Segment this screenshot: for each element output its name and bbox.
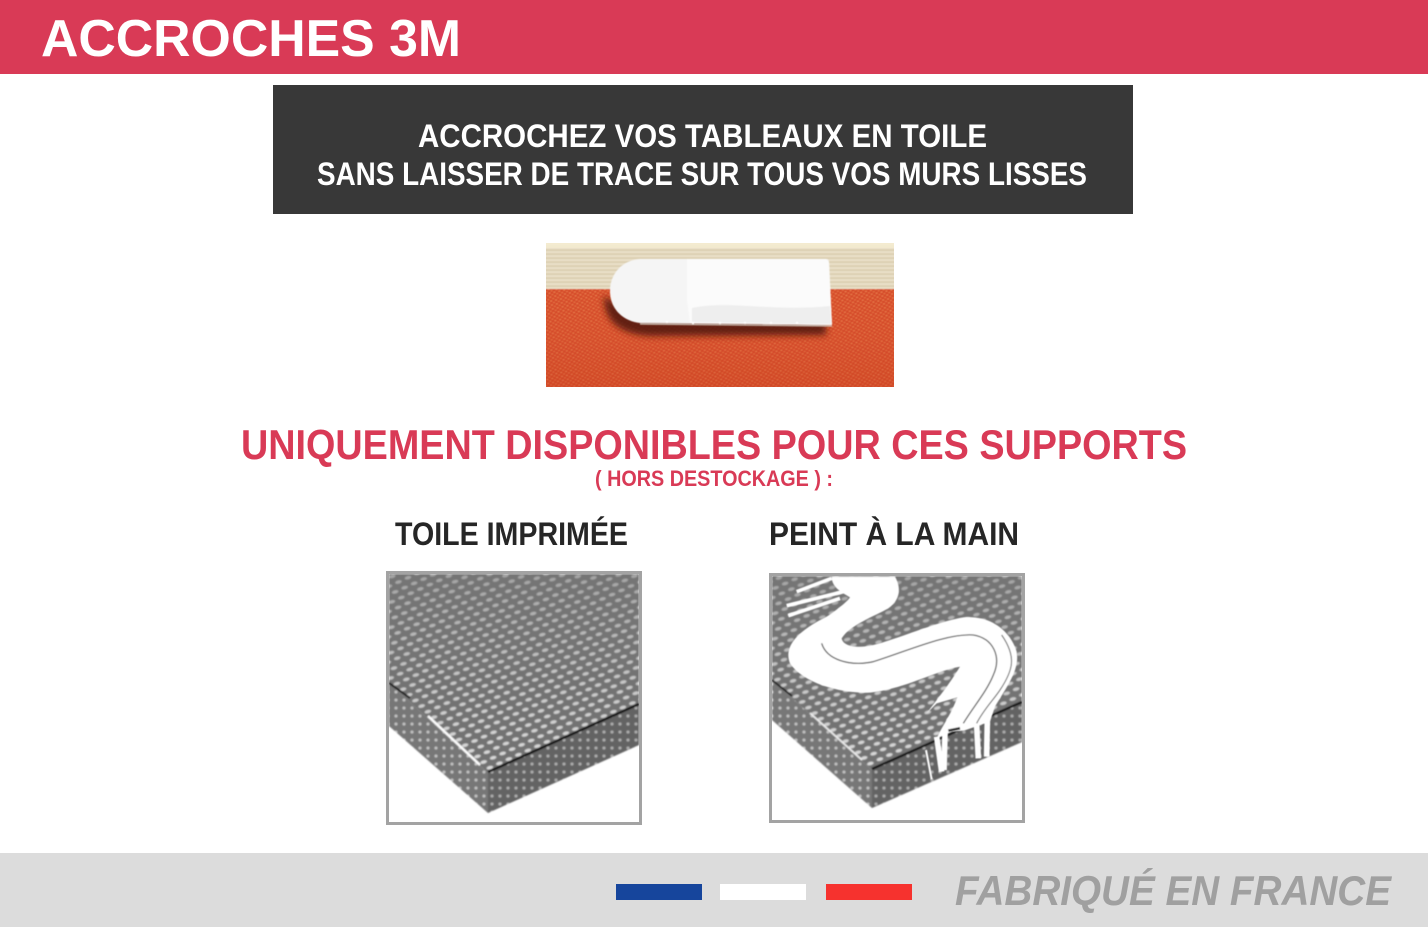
flag: white [720,884,806,900]
white hook [610,259,832,326]
banner text: ACCROCHEZ VOS TABLEAUX EN TOILE [418,118,987,154]
label: toile imprimee: TOILE IMPRIMÉE [395,516,628,552]
heading: supports [241,421,1187,491]
title: ACCROCHES 3M [41,10,461,68]
sub heading: ( HORS DESTOCKAGE ) : [595,466,833,491]
footer text: FABRIQUÉ EN FRANCE [955,867,1393,915]
header bar [0,0,1428,74]
dark banner [273,85,1133,214]
heading: supports: UNIQUEMENT DISPONIBLES POUR CES SUPPORTS [241,421,1187,468]
hook shadow [604,296,826,336]
flag: blue [616,884,702,900]
panel: printed canvas [388,572,640,824]
footer bar [0,853,1428,927]
label: peint a la main: PEINT À LA MAIN [769,516,1019,552]
photo: 3M hook on canvas [540,240,900,391]
panel: hand painted canvas [770,574,1024,822]
banner text [317,118,1087,192]
flag: red [826,884,912,900]
paint stroke [787,577,1017,779]
banner text: SANS LAISSER DE TRACE SUR TOUS VOS MURS LISSES [317,156,1087,192]
